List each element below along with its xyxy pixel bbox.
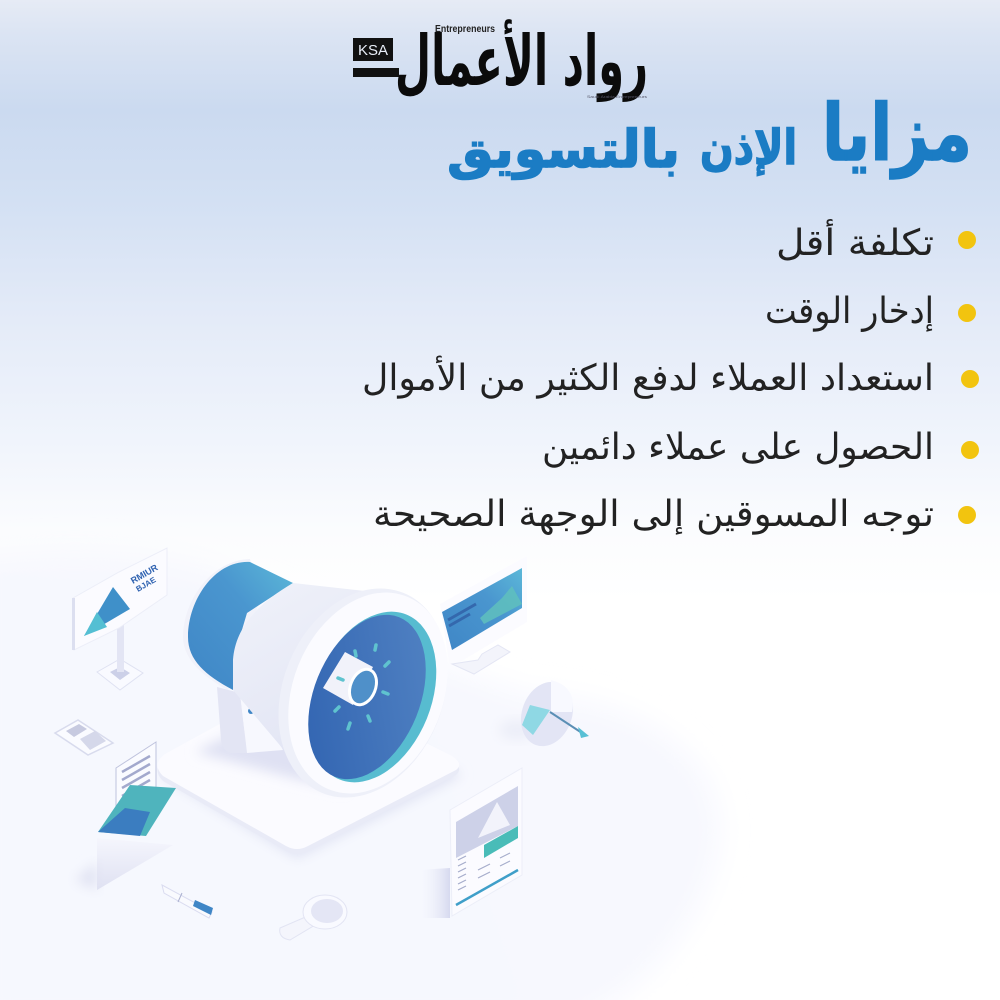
icon: magnifier (280, 895, 347, 940)
logo: Entrepreneurs KSA (353, 19, 648, 102)
megaphone rim (248, 563, 478, 823)
logo Entrepreneurs label: Entrepreneurs (435, 24, 495, 35)
logo tagline: Saudi Arabia Entrepreneurs (587, 94, 647, 99)
bullet item 1: تكلفة أقل (776, 219, 934, 264)
heading word 2: الإذن (700, 120, 797, 176)
heading (447, 89, 972, 180)
platform (157, 680, 462, 858)
megaphone inner blue (286, 597, 448, 797)
icon: billboard: RMIUR (129, 562, 160, 586)
icon: megaphone (183, 559, 478, 823)
icon: billboard: BJAE (134, 575, 158, 594)
megaphone teal crescent (286, 593, 460, 801)
icon: pen (162, 885, 213, 918)
icon: report document (418, 768, 522, 918)
logo KSA badge (353, 38, 393, 61)
icon: target dial (499, 674, 589, 754)
bullet item 5: توجه المسوقين إلى الوجهة الصحيحة (373, 494, 934, 535)
icon: paper and envelope (75, 742, 176, 890)
icon: calculator (55, 720, 113, 755)
megaphone back cap (183, 559, 260, 690)
list of benefits (362, 219, 979, 535)
megaphone cone (233, 583, 420, 770)
illustration (55, 548, 589, 940)
megaphone stand (217, 687, 247, 753)
megaphone blue band (188, 562, 293, 690)
icon: monitor (440, 556, 527, 674)
heading word 3: بالتسويق (447, 120, 680, 180)
bullet item 2: إدخار الوقت (765, 291, 934, 332)
logo underbar (353, 68, 399, 77)
heading word 1: مزايا (822, 89, 972, 179)
megaphone tube (323, 652, 373, 705)
logo wordmark: رواد الأعمال (395, 19, 648, 102)
bullet item 3: استعداد العملاء لدفع الكثير من الأموال (362, 355, 934, 399)
icon: billboard (72, 548, 167, 690)
megaphone sound ticks (335, 645, 389, 729)
logo KSA badge: KSA (358, 42, 388, 59)
bullet item 1 (776, 219, 976, 264)
bullet item 4: الحصول على عملاء دائمين (542, 427, 934, 468)
